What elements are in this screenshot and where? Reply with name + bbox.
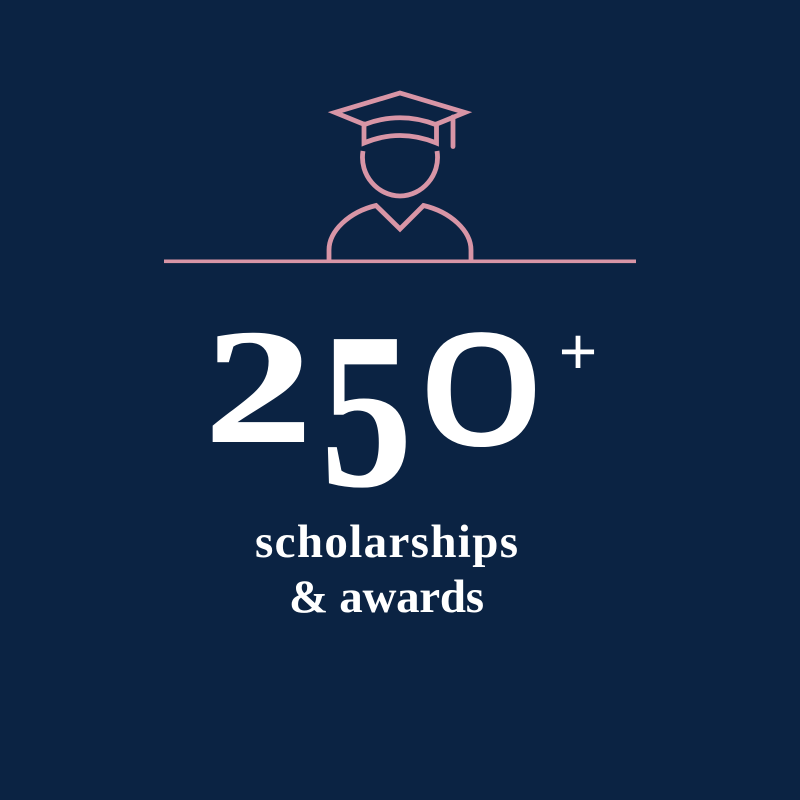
big number: 250+ bbox=[205, 287, 597, 533]
caption: scholarships & awards bbox=[255, 516, 518, 623]
big number: 250+: 2 bbox=[205, 298, 312, 477]
caption: scholarships & awards: & awards bbox=[289, 571, 484, 623]
big number: 250+: + bbox=[559, 314, 597, 388]
baseline rule bbox=[164, 260, 636, 263]
icon: graduate with mortarboard bbox=[329, 93, 471, 261]
big number: 250+: 5 bbox=[321, 287, 412, 533]
caption: scholarships & awards: scholarships bbox=[255, 516, 518, 568]
big number: 250+: 0 bbox=[421, 301, 541, 478]
